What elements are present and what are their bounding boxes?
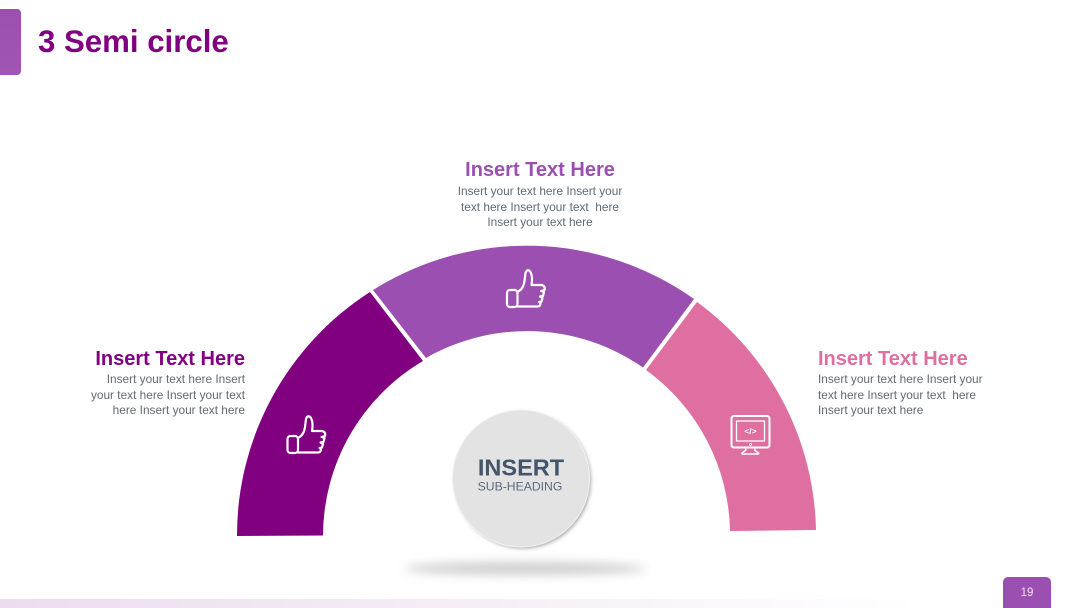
page number badge: 19 — [1021, 587, 1033, 599]
right body text: Insert your text here Insert your — [818, 372, 983, 386]
bottom gradient band — [0, 599, 1080, 608]
text block: left — [91, 348, 245, 417]
left body text: your text here Insert your text — [91, 388, 245, 402]
center heading: INSERT — [478, 454, 565, 480]
top body text: Insert your text here Insert your — [458, 184, 622, 198]
text block: top — [458, 159, 622, 229]
segment: middle purple — [373, 246, 694, 368]
segment: left dark purple — [237, 292, 423, 536]
right body text: Insert your text here — [818, 403, 923, 417]
text block: right — [818, 348, 983, 417]
icon: thumbs up left — [288, 416, 325, 453]
icon: monitor with code — [732, 416, 770, 454]
icon: thumbs up middle — [507, 270, 545, 307]
top body text: text here Insert your text here — [461, 200, 619, 214]
top heading: Insert Text Here — [465, 159, 615, 181]
left body text: Insert your text here Insert — [107, 372, 245, 386]
right body text: text here Insert your text here — [818, 388, 976, 402]
left body text: here Insert your text here — [113, 403, 245, 417]
title accent bar — [0, 9, 21, 75]
segment: right pink — [646, 302, 816, 531]
icon: monitor with code: </> — [744, 426, 757, 436]
center subheading: SUB-HEADING — [478, 480, 562, 494]
center circle — [452, 410, 590, 548]
top body text: Insert your text here — [487, 215, 593, 229]
title: 3 Semi circle — [38, 24, 229, 59]
page number badge — [1003, 577, 1051, 608]
left body text — [91, 372, 245, 417]
ground shadow — [404, 562, 646, 575]
top body text — [458, 184, 622, 229]
left heading: Insert Text Here — [95, 348, 245, 370]
right body text — [818, 372, 983, 417]
right heading: Insert Text Here — [818, 348, 968, 370]
